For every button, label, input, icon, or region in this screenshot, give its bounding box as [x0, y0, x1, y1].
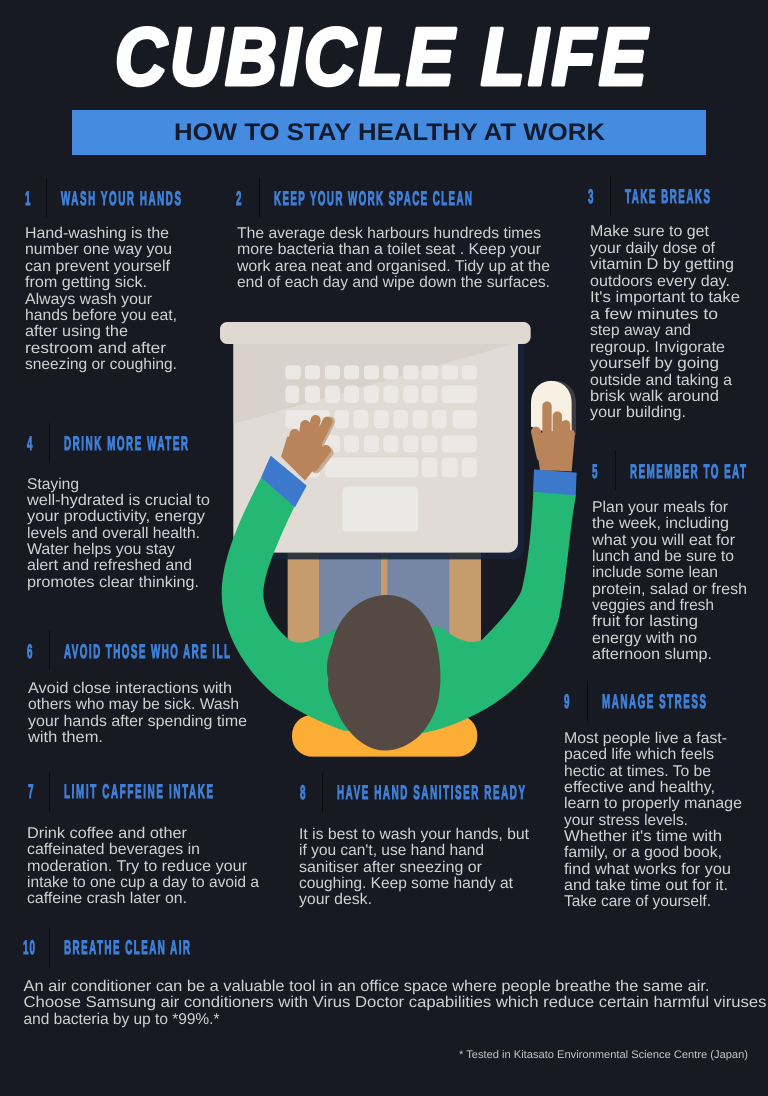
tip 9 text: your stress levels. [564, 812, 688, 829]
footnote: * Tested in Kitasato Environmental Science Centre (Japan) [459, 1049, 748, 1061]
tip 5 text: lunch and be sure to [592, 548, 734, 565]
tip 9 text: effective and healthy, [564, 779, 715, 796]
tip 8 text: It is best to wash your hands, but [299, 826, 530, 843]
tip 4 heading: 4 [27, 433, 32, 455]
tip 5 text: veggies and fresh [592, 597, 714, 614]
tip 2 heading [236, 178, 472, 218]
tip 4 heading [27, 423, 188, 463]
tip 5 text: include some lean [592, 564, 718, 581]
tip 10: breathe clean air [23, 928, 767, 1028]
tip 4 text: well-hydrated is crucial to [26, 492, 210, 509]
tip 5 text: protein, salad or fresh [592, 581, 747, 598]
tip 6 text: Avoid close interactions with [28, 680, 232, 697]
tip 4: drink more water [26, 423, 210, 591]
tip 9 text: and take time out for it. [564, 877, 728, 894]
tip 3 heading [588, 176, 710, 216]
right cuff [533, 469, 577, 495]
tip 1 text: Hand-washing is the [25, 225, 169, 242]
tip 3 text: a few minutes to [590, 306, 718, 323]
tip 7 text: caffeinated beverages in [27, 841, 200, 858]
tip 7 text [27, 825, 259, 907]
tip 5 heading [592, 450, 746, 490]
title: CUBICLE LIFE [115, 12, 649, 102]
tip 5 text: what you will eat for [591, 532, 735, 549]
tip 1 heading [25, 178, 181, 218]
laptop shadow [240, 343, 524, 559]
tip 4 heading: DRINK MORE WATER [64, 433, 188, 455]
tip 6 text: with them. [27, 729, 103, 746]
tip 9 text: paced life which feels [564, 746, 714, 763]
tip 1 text: restroom and after [25, 340, 166, 357]
right hand [535, 406, 575, 471]
tip 10 heading [23, 928, 190, 968]
subtitle banner [72, 110, 706, 155]
tip 1 heading: 1 [25, 188, 30, 210]
tip 10 heading: 10 [23, 937, 35, 959]
tip 1 text: hands before you eat, [25, 307, 177, 324]
tip 2: keep your work space clean [236, 178, 550, 291]
tip 5 heading: 5 [592, 461, 598, 483]
mouse [531, 381, 576, 437]
tip 3: take breaks [588, 176, 740, 421]
tip 6 text: your hands after spending time [28, 713, 247, 730]
subtitle banner: HOW TO STAY HEALTHY AT WORK [174, 119, 606, 146]
tip 3 text: It's important to take [590, 289, 740, 306]
tip 2 text: work area neat and organised. Tidy up at the [236, 258, 550, 275]
tip 6 text [27, 680, 247, 746]
tip 1 text: after using the [25, 323, 128, 340]
tip 2 text: The average desk harbours hundreds times [237, 225, 541, 242]
laptop [220, 322, 531, 553]
left cuff [261, 456, 307, 507]
tip 1 text: sneezing or coughing. [25, 356, 177, 373]
tip 7: limit caffeine intake [27, 772, 259, 907]
keyboard [285, 365, 477, 477]
tip 8 text: if you can't, use hand hand [299, 842, 484, 859]
left hand [281, 420, 330, 481]
tip 5 text: the week, including [592, 515, 729, 532]
tip 3 text [590, 223, 740, 421]
tip 10 text: An air conditioner can be a valuable tool in an office space where people breathe the same air. [24, 978, 710, 995]
illustration: person at laptop seen from above [220, 322, 577, 757]
tip 9 text: family, or a good book, [564, 844, 722, 861]
tip 9 heading [564, 681, 706, 721]
tip 5 text: energy with no [592, 630, 697, 647]
tip 3 text: outdoors every day. [590, 273, 730, 290]
tip 7 text: Drink coffee and other [27, 825, 187, 842]
tip 4 text: Staying [27, 476, 79, 493]
tip 3 text: vitamin D by getting [590, 256, 734, 273]
tip 2 text: more bacteria than a toilet seat . Keep your [237, 241, 541, 258]
tip 9 text [564, 730, 742, 910]
tip 9 heading: 9 [564, 691, 570, 713]
tip 1 heading: WASH YOUR HANDS [61, 188, 181, 210]
tip 5 text: Plan your meals for [592, 499, 728, 516]
tip 7 heading: 7 [28, 781, 34, 803]
tip 9 text: hectic at times. To be [564, 763, 711, 780]
tip 6 text: others who may be sick. Wash [28, 696, 239, 713]
tip 4 text: promotes clear thinking. [27, 574, 199, 591]
tip 9 text: Whether it's time with [564, 828, 722, 845]
tip 7 text: caffeine crash later on. [27, 890, 187, 907]
tip 8 text: sanitiser after sneezing or [299, 859, 482, 876]
tip 9 heading: MANAGE STRESS [602, 691, 706, 713]
tip 7 heading [28, 772, 213, 812]
tip 9 text: find what works for you [564, 861, 731, 878]
tip 3 text: yourself by going [590, 355, 719, 372]
tip 9 text: Take care of yourself. [564, 893, 711, 910]
trousers [319, 553, 449, 649]
tip 2 heading: KEEP YOUR WORK SPACE CLEAN [274, 188, 472, 210]
tip 4 text [26, 476, 210, 591]
tip 8 text [299, 826, 530, 908]
tip 1 text: Always wash your [25, 291, 152, 308]
tip 5 text: afternoon slump. [592, 646, 712, 663]
tip 1 text: can prevent yourself [25, 258, 171, 275]
tip 3 text: your building. [590, 404, 686, 421]
tip 8 heading: HAVE HAND SANITISER READY [337, 782, 525, 804]
tip 6 heading [27, 630, 230, 670]
tip 3 text: brisk walk around [590, 388, 719, 405]
tip 7 text: moderation. Try to reduce your [27, 858, 247, 875]
tip 9 text: learn to properly manage [564, 795, 742, 812]
desk legs [288, 553, 481, 649]
tip 8 text: your desk. [299, 891, 372, 908]
tip 3 text: Make sure to get [590, 223, 710, 240]
tip 2 text [236, 225, 550, 291]
tip 3 text: your daily dose of [590, 240, 716, 257]
tip 8 heading [300, 773, 525, 813]
tip 9 text: Most people live a fast- [564, 730, 727, 747]
tip 4 text: alert and refreshed and [27, 557, 192, 574]
sweater [222, 478, 576, 734]
tip 5: remember to eat [591, 450, 747, 663]
tip 8: have hand sanitiser ready [299, 773, 530, 908]
tip 9: manage stress [564, 681, 742, 910]
tip 4 text: levels and overall health. [27, 525, 200, 542]
tip 10 heading: BREATHE CLEAN AIR [64, 937, 190, 959]
tip 4 text: your productivity, energy [27, 508, 205, 525]
tip 2 heading: 2 [236, 188, 242, 210]
tip 1 text: number one way you [25, 241, 172, 258]
tip 10 text: Choose Samsung air conditioners with Virus Doctor capabilities which reduce certain harmful viruses [24, 994, 767, 1011]
seat [292, 715, 477, 757]
tip 1: wash your hands [25, 178, 181, 373]
tip 10 text: and bacteria by up to *99%.* [24, 1011, 220, 1028]
tip 4 text: Water helps you stay [27, 541, 175, 558]
tip 2 text: end of each day and wipe down the surfaces. [237, 274, 550, 291]
tip 3 heading: 3 [588, 186, 594, 208]
tip 3 text: regroup. Invigorate [590, 339, 725, 356]
tip 3 heading: TAKE BREAKS [625, 186, 710, 208]
tip 8 heading: 8 [300, 782, 306, 804]
tip 8 text: coughing. Keep some handy at [299, 875, 514, 892]
tip 3 text: outside and taking a [590, 372, 732, 389]
tip 7 heading: LIMIT CAFFEINE INTAKE [64, 781, 213, 803]
tip 10 text [24, 978, 767, 1028]
trackpad [343, 487, 418, 532]
head [327, 595, 440, 751]
tip 5 heading: REMEMBER TO EAT [630, 461, 746, 483]
tip 6 heading: 6 [27, 641, 32, 663]
tip 6 heading: AVOID THOSE WHO ARE ILL [64, 641, 230, 663]
tip 5 text: fruit for lasting [592, 613, 698, 630]
tip 1 text: from getting sick. [25, 274, 147, 291]
tip 6: avoid those who are ill [27, 630, 247, 746]
tip 1 text [25, 225, 177, 373]
tip 3 text: step away and [590, 322, 691, 339]
tip 7 text: intake to one cup a day to avoid a [27, 874, 259, 891]
tip 5 text [591, 499, 747, 663]
